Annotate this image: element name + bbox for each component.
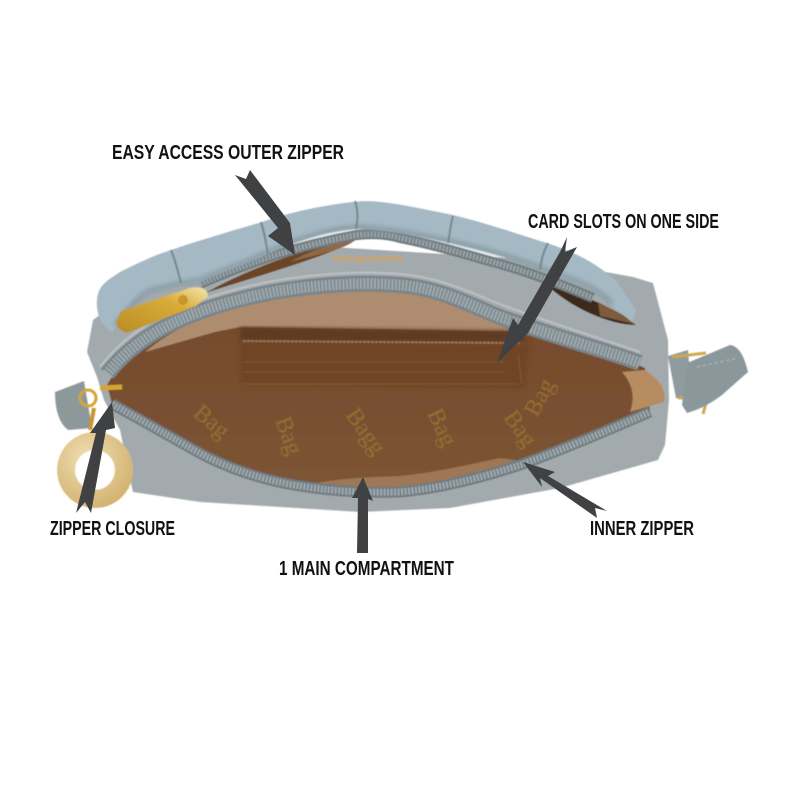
- lining logo pattern: Bag: [498, 406, 542, 452]
- arrow: main compartment: [352, 477, 373, 553]
- handle lower shading: [115, 227, 612, 325]
- bag illustration: [55, 201, 748, 512]
- left strap: [55, 381, 92, 430]
- outer pocket lining wedges: [205, 238, 636, 325]
- gold ring pull: [57, 387, 133, 508]
- dark pocket band: [240, 327, 530, 342]
- lining logo pattern: Bag: [422, 405, 461, 451]
- label: inner zipper: INNER ZIPPER: [590, 518, 694, 540]
- lining logo pattern: [188, 374, 560, 460]
- label: easy access outer zipper: EASY ACCESS OUTER ZIPPER: [112, 142, 344, 164]
- outer zipper: [200, 234, 593, 298]
- arrow: zipper closure: [76, 402, 115, 513]
- lining logo pattern: Bag: [269, 413, 307, 458]
- interior lining: [107, 284, 650, 492]
- card slot pocket: [240, 341, 530, 388]
- lining logo pattern: Bag: [519, 374, 560, 421]
- lining logo pattern: Bagg: [340, 404, 390, 460]
- label: zipper closure: ZIPPER CLOSURE: [50, 518, 175, 540]
- label: card slots on one side: CARD SLOTS ON ONE SIDE: [528, 211, 719, 233]
- handle segment seams: [171, 201, 548, 283]
- label: main compartment: 1 MAIN COMPARTMENT: [279, 558, 454, 580]
- main zipper bottom: [112, 404, 650, 492]
- gold zipper pull: [116, 287, 208, 333]
- handle: [97, 201, 636, 332]
- main zipper top: [100, 273, 640, 374]
- arrow: card slots: [497, 237, 577, 363]
- tan lining strip: [310, 458, 523, 490]
- bag body: [87, 245, 669, 512]
- tan back pocket: [145, 289, 512, 352]
- tan side flap: [622, 370, 665, 412]
- arrow: inner zipper: [523, 462, 607, 518]
- lining logo pattern: Bag: [188, 400, 234, 444]
- logo on panel: bagamm: [333, 254, 403, 263]
- arrow: easy access outer zipper: [235, 170, 295, 255]
- right strap and buckle: [668, 345, 748, 414]
